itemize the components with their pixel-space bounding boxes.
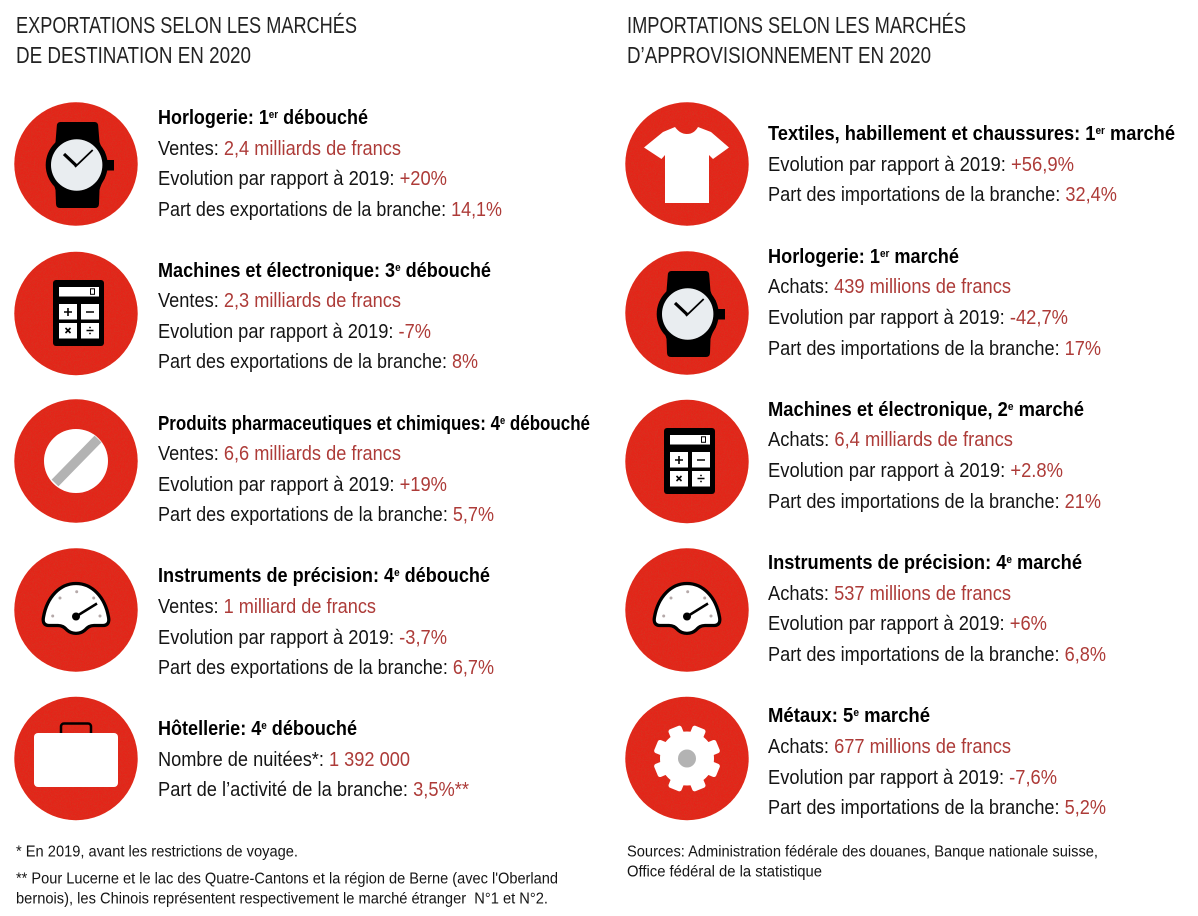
text: horlogerie export figures: Horlogerie: 1 <box>158 107 281 129</box>
text: pharma export figures: e <box>500 415 505 427</box>
footnotes <box>16 844 558 908</box>
title: exportations: DE DESTINATION EN 2020 <box>16 42 251 68</box>
text: machines import figures: Machines et électronique, 2 <box>768 399 1029 421</box>
text: metaux import figures: Métaux: 5 <box>768 705 860 727</box>
text: textiles import figures: Textiles, habillement et chaussures: 1 <box>768 123 1127 145</box>
text: hotellerie figures: Hôtellerie: 4 <box>158 718 272 740</box>
text: machines export figures: Machines et électronique: 3 <box>158 260 420 282</box>
text: horlogerie import figures: marché <box>889 246 959 268</box>
text: hotellerie figures <box>158 718 469 801</box>
text: textiles import figures: Evolution par rapport à 2019: +56,9% <box>768 154 1074 176</box>
text: horlogerie export figures: Ventes: 2,4 milliards de francs <box>158 138 401 160</box>
text: pharma export figures: Evolution par rapport à 2019: +19% <box>158 474 447 496</box>
icon: watch on red circle <box>14 102 138 226</box>
text: machines export figures <box>158 260 491 373</box>
footnotes: bernois), les Chinois représentent respectivement le marché étranger N°1 et N°2. <box>16 890 548 908</box>
text: machines export figures: e <box>395 262 401 274</box>
panel: exportations instruments <box>14 548 494 679</box>
text: machines import figures: Part des importations de la branche: 21% <box>768 491 1101 513</box>
footnotes: * En 2019, avant les restrictions de voyage. <box>16 844 298 860</box>
text: instruments import figures: Achats: 537 millions de francs <box>768 583 1011 605</box>
sources <box>627 844 1098 880</box>
text: instruments import figures: marché <box>1012 552 1082 574</box>
text: horlogerie import figures: er <box>880 248 890 260</box>
text: horlogerie import figures: Evolution par rapport à 2019: -42,7% <box>768 307 1068 329</box>
text: machines export figures: débouché <box>401 260 491 282</box>
text: machines export figures: Ventes: 2,3 milliards de francs <box>158 290 401 312</box>
text: instruments import figures: e <box>1006 554 1012 566</box>
text: hotellerie figures: Nombre de nuitées*: 1 392 000 <box>158 749 410 771</box>
title: exportations <box>16 12 357 68</box>
text: horlogerie import figures: Horlogerie: 1 <box>768 246 891 268</box>
text: instruments import figures: Instruments de précision: 4 <box>768 552 1029 574</box>
icon: t-shirt on red circle <box>625 102 749 226</box>
text: metaux import figures: Evolution par rapport à 2019: -7,6% <box>768 767 1057 789</box>
text: instruments import figures <box>768 552 1106 666</box>
panel: exportations machines <box>14 252 491 375</box>
text: instruments import figures: Part des importations de la branche: 6,8% <box>768 644 1106 666</box>
text: horlogerie import figures <box>768 246 1101 360</box>
text: textiles import figures: er <box>1095 125 1106 137</box>
text: hotellerie figures: e <box>261 720 267 732</box>
text: hotellerie figures: Part de l’activité de la branche: 3,5%** <box>158 779 469 801</box>
text: instruments export figures <box>158 565 494 679</box>
text: horlogerie export figures <box>158 107 502 221</box>
icon: watch on red circle <box>625 251 749 375</box>
icon: pill on red circle <box>14 399 138 523</box>
text: horlogerie export figures: débouché <box>278 107 368 129</box>
text: pharma export figures: débouché <box>505 413 590 435</box>
panel: exportations pharma <box>14 399 590 526</box>
text: machines import figures: Achats: 6,4 milliards de francs <box>768 429 1013 451</box>
text: horlogerie export figures: Evolution par rapport à 2019: +20% <box>158 168 447 190</box>
title: exportations: EXPORTATIONS SELON LES MARCHÉS <box>16 12 357 38</box>
text: horlogerie export figures: Part des exportations de la branche: 14,1% <box>158 199 502 221</box>
text: horlogerie import figures: Achats: 439 millions de francs <box>768 276 1011 298</box>
text: machines import figures: e <box>1008 401 1014 413</box>
panel: importations textiles <box>625 102 1175 226</box>
sources: Office fédéral de la statistique <box>627 864 822 880</box>
text: metaux import figures: Part des importations de la branche: 5,2% <box>768 797 1106 819</box>
text: instruments export figures: e <box>394 567 400 579</box>
sources: Sources: Administration fédérale des douanes, Banque nationale suisse, <box>627 844 1098 860</box>
footnotes: ** Pour Lucerne et le lac des Quatre-Cantons et la région de Berne (avec l'Oberland <box>16 870 558 888</box>
text: textiles import figures <box>768 123 1175 206</box>
icon: gauge on red circle <box>14 548 138 672</box>
panel: exportations horlogerie <box>14 102 502 226</box>
text: pharma export figures <box>158 413 590 526</box>
text: machines import figures: marché <box>1014 399 1084 421</box>
text: horlogerie import figures: Part des importations de la branche: 17% <box>768 338 1101 360</box>
title: importations <box>627 12 966 68</box>
text: pharma export figures: Ventes: 6,6 milliards de francs <box>158 443 401 465</box>
text: machines import figures: Evolution par rapport à 2019: +2.8% <box>768 460 1063 482</box>
panel: importations machines <box>625 399 1101 523</box>
text: machines export figures: Evolution par rapport à 2019: -7% <box>158 321 431 343</box>
text: machines import figures <box>768 399 1101 513</box>
panel: importations horlogerie <box>625 246 1101 375</box>
text: instruments export figures: Part des exportations de la branche: 6,7% <box>158 657 494 679</box>
text: instruments import figures: Evolution par rapport à 2019: +6% <box>768 613 1047 635</box>
text: metaux import figures: e <box>853 707 859 719</box>
text: pharma export figures: Part des exportations de la branche: 5,7% <box>158 504 494 526</box>
icon: calculator on red circle <box>625 400 749 523</box>
text: metaux import figures: marché <box>859 705 930 727</box>
icon: gauge on red circle <box>625 548 749 672</box>
text: horlogerie export figures: er <box>269 109 279 121</box>
text: instruments export figures: débouché <box>400 565 490 587</box>
panel: importations metaux <box>625 697 1106 820</box>
text: metaux import figures: Achats: 677 millions de francs <box>768 736 1011 758</box>
title: importations: D’APPROVISIONNEMENT EN 2020 <box>627 42 931 68</box>
text: metaux import figures <box>768 705 1106 819</box>
text: instruments export figures: Evolution par rapport à 2019: -3,7% <box>158 627 447 649</box>
title: importations: IMPORTATIONS SELON LES MARCHÉS <box>627 12 966 38</box>
text: textiles import figures: marché <box>1105 123 1175 145</box>
text: hotellerie figures: débouché <box>267 718 357 740</box>
text: textiles import figures: Part des importations de la branche: 32,4% <box>768 184 1117 206</box>
icon: suitcase on red circle <box>14 697 138 820</box>
panel: exportations hotellerie <box>14 697 469 820</box>
text: machines export figures: Part des exportations de la branche: 8% <box>158 351 478 373</box>
icon: gear on red circle <box>625 697 749 820</box>
panel: importations instruments <box>625 548 1106 672</box>
text: instruments export figures: Instruments de précision: 4 <box>158 565 419 587</box>
text: pharma export figures: Produits pharmaceutiques et chimiques: 4 <box>158 413 561 435</box>
icon: calculator on red circle <box>14 252 138 375</box>
text: instruments export figures: Ventes: 1 milliard de francs <box>158 596 376 618</box>
